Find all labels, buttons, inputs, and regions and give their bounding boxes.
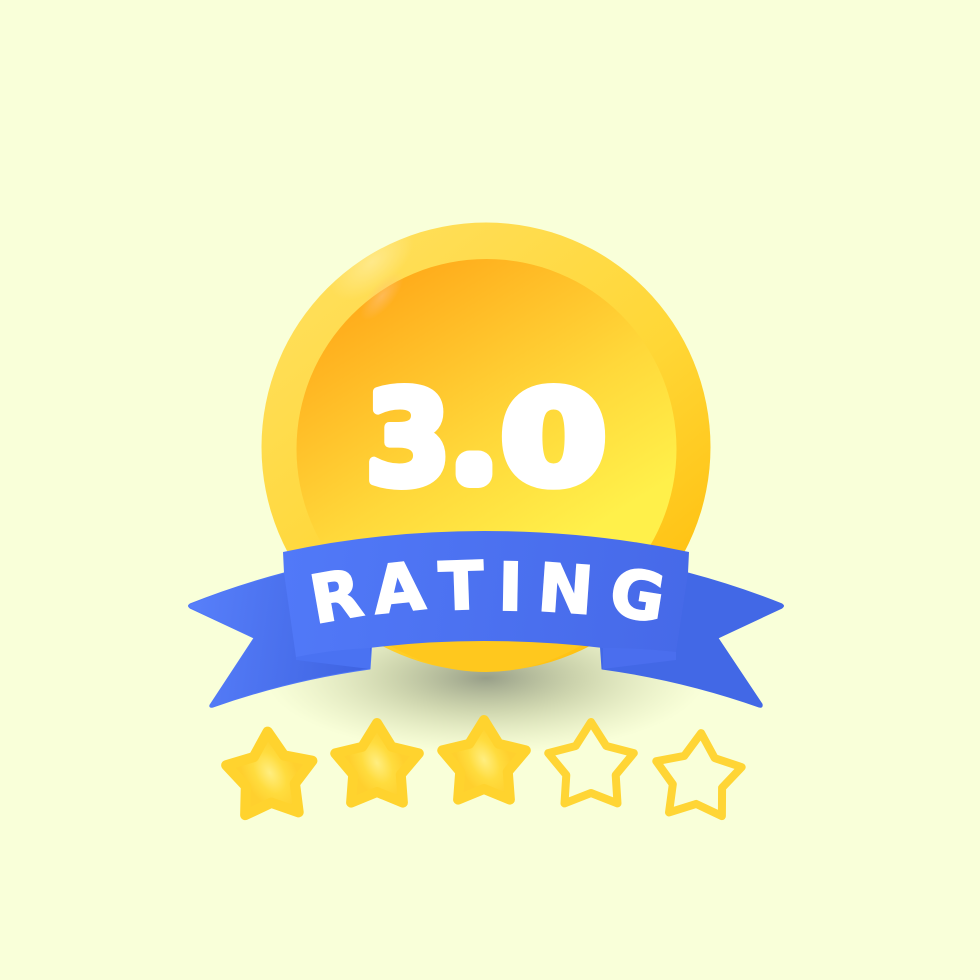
star rating: 3 of 5 <box>225 720 744 817</box>
left ribbon tail <box>188 573 372 707</box>
coin bottom visible under ribbon <box>381 636 590 672</box>
ribbon label: G <box>605 554 670 638</box>
rating value <box>366 365 606 514</box>
coin <box>262 210 710 671</box>
ribbon label: R <box>304 555 368 639</box>
ribbon label: T <box>437 547 485 626</box>
main ribbon band <box>283 531 689 657</box>
right ribbon tail <box>600 573 784 707</box>
ribbon label: I <box>497 549 523 626</box>
rating value: 0 <box>501 365 606 514</box>
filled star 1 <box>225 729 315 816</box>
rating badge infographic <box>188 222 784 820</box>
rating value: . <box>464 428 484 486</box>
ribbon label: N <box>535 549 596 630</box>
outline star 5 <box>653 730 744 817</box>
ribbon label <box>304 547 670 639</box>
ribbon label: A <box>369 548 428 630</box>
ribbon fold left <box>296 640 370 669</box>
drop shadow <box>266 602 706 754</box>
ribbon fold right <box>603 640 676 669</box>
rating value: 3 <box>366 365 450 514</box>
filled star 2 <box>335 723 419 803</box>
outline star 4 <box>548 722 634 803</box>
filled star 3 <box>442 720 526 800</box>
ribbon <box>188 531 784 707</box>
